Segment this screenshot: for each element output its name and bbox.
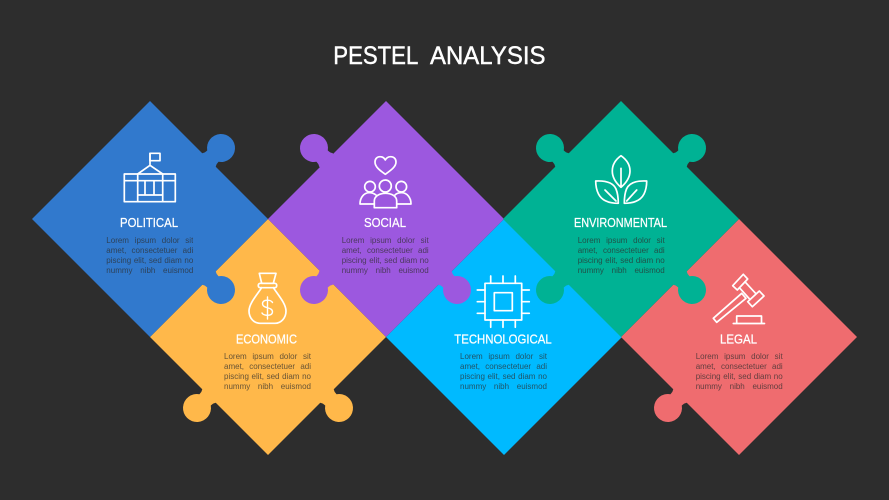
text: political: Lorem ipsum dolor sit [106,236,193,244]
text: social: Lorem ipsum dolor sit [342,236,429,244]
panel: technological [386,219,622,455]
heading: environmental: ENVIRONMENTAL [574,215,667,230]
text: economic [224,352,311,394]
text: technological: amet, consectetuer adi [460,362,547,371]
panel: environmental [503,101,739,337]
text: technological: Lorem ipsum dolor sit [460,352,547,361]
text: economic: piscing elit, sed diam no [224,372,311,381]
icon: government building [124,153,175,202]
text: legal: Lorem ipsum dolor sit [696,352,783,361]
text: social [342,236,429,278]
text: legal: piscing elit, sed diam no [696,372,783,381]
text: legal: amet, consectetuer adi [696,362,783,371]
heading: technological: TECHNOLOGICAL [454,332,552,346]
panel: social [268,101,504,337]
icon: microchip [477,276,529,327]
text: technological [460,352,547,394]
title [333,42,546,70]
text: environmental: amet, consectetuer adi [578,246,665,254]
text: political: amet, consectetuer adi [106,246,193,254]
heading: legal: LEGAL [720,332,757,346]
icon: money bag [249,273,286,323]
text: political [106,236,193,278]
text: environmental: Lorem ipsum dolor sit [578,236,665,244]
text: legal: nummy nibh euismod [696,382,783,391]
text: social: amet, consectetuer adi [342,246,429,254]
text: economic: amet, consectetuer adi [224,362,311,371]
text: political: nummy nibh euismod [106,266,193,274]
text: social: piscing elit, sed diam no [342,256,429,264]
text: economic: nummy nibh euismod [224,382,311,391]
text: environmental: piscing elit, sed diam no [578,256,665,264]
heading: political: POLITICAL [120,215,178,230]
text: technological: piscing elit, sed diam no [460,372,547,381]
text: economic: Lorem ipsum dolor sit [224,352,311,361]
panel: political [32,101,268,337]
text: social: nummy nibh euismod [342,266,429,274]
icon: leaves [596,156,647,203]
icon: gavel [713,274,764,324]
title: PESTEL [333,42,418,70]
text: technological: nummy nibh euismod [460,382,547,391]
panel: economic [150,219,386,455]
heading: economic: ECONOMIC [236,332,297,346]
panel: legal [621,219,857,455]
text: environmental: nummy nibh euismod [578,266,665,274]
heading: social: SOCIAL [364,215,406,230]
text: political: piscing elit, sed diam no [106,256,193,264]
text: legal [696,352,783,394]
text: environmental [578,236,665,278]
icon: people and heart [360,157,411,208]
title: ANALYSIS [430,42,546,70]
